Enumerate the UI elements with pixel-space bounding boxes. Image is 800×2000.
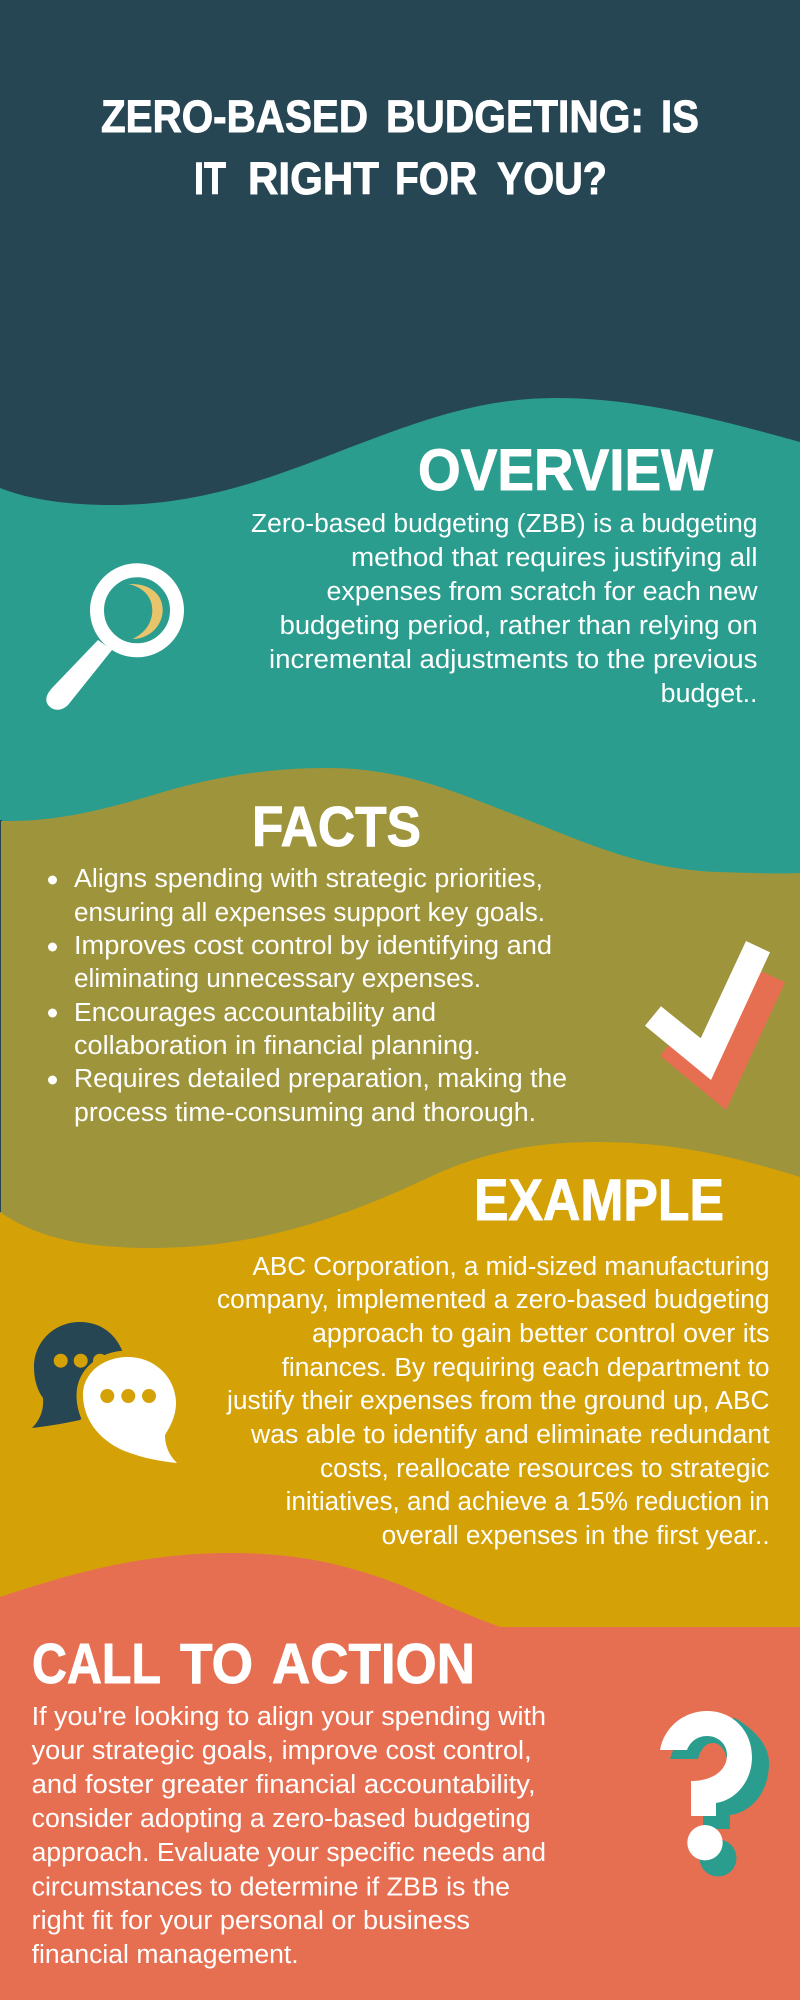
icon: check mark: [645, 941, 785, 1110]
call to action heading: ACTION: [272, 1632, 475, 1696]
call to action text: your strategic goals, improve cost control,: [32, 1737, 532, 1765]
facts bullet list: [48, 865, 567, 1127]
panel: facts: [1, 768, 800, 2000]
facts bullet list: Encourages accountability and: [74, 999, 436, 1027]
example text: costs, reallocate resources to strategic: [320, 1455, 770, 1483]
facts bullet list: collaboration in financial planning.: [74, 1032, 481, 1060]
call to action text: right fit for your personal or business: [32, 1907, 470, 1935]
overview text: expenses from scratch for each new: [326, 578, 758, 606]
facts heading: FACTS: [252, 795, 421, 859]
call to action text: approach. Evaluate your specific needs and: [32, 1839, 546, 1867]
overview text: budget..: [661, 680, 758, 708]
call to action text: If you're looking to align your spending with: [32, 1703, 546, 1731]
call to action wave background: [0, 1553, 800, 2000]
facts bullet list: Requires detailed preparation, making the: [74, 1065, 567, 1093]
example text: justify their expenses from the ground up, ABC: [226, 1387, 770, 1415]
title: [101, 91, 699, 204]
title: IT: [194, 153, 226, 204]
title: ZERO-BASED: [101, 91, 368, 142]
call to action text: and foster greater financial accountability,: [32, 1771, 536, 1799]
example text: initiatives, and achieve a 15% reduction in: [286, 1488, 770, 1516]
icon: magnifying glass: [46, 570, 177, 710]
title: RIGHT: [248, 153, 379, 204]
facts bullet list: process time-consuming and thorough.: [74, 1099, 536, 1127]
example text: company, implemented a zero-based budgeting: [217, 1286, 769, 1314]
example text: finances. By requiring each department to: [282, 1354, 770, 1382]
call to action heading: CALL: [32, 1632, 161, 1696]
example heading: EXAMPLE: [474, 1168, 724, 1233]
title: FOR: [395, 153, 477, 204]
overview text: Zero-based budgeting (ZBB) is a budgeting: [251, 510, 758, 538]
facts wave background: [1, 768, 800, 2000]
call to action heading: [32, 1632, 475, 1696]
example text: [217, 1253, 770, 1550]
overview text: budgeting period, rather than relying on: [280, 612, 758, 640]
panel: example: [0, 1142, 800, 2000]
facts bullet list: Improves cost control by identifying and: [74, 932, 552, 960]
facts bullet list: eliminating unnecessary expenses.: [74, 965, 481, 993]
example text: was able to identify and eliminate redundant: [250, 1421, 770, 1449]
dark speech bubble: [32, 1322, 123, 1428]
example text: approach to gain better control over its: [312, 1320, 770, 1348]
title: IS: [661, 91, 699, 142]
title: BUDGETING:: [386, 91, 644, 142]
example wave background: [0, 1142, 800, 2000]
panel: call to action: [0, 1553, 800, 2000]
overview text: [251, 510, 758, 708]
call to action text: [32, 1703, 546, 1969]
call to action text: consider adopting a zero-based budgeting: [32, 1805, 531, 1833]
facts bullet list: Aligns spending with strategic priorities,: [74, 865, 543, 893]
icon: speech bubbles: [32, 1322, 177, 1463]
icon: question mark: [660, 1711, 769, 1876]
example text: overall expenses in the first year..: [382, 1522, 770, 1550]
left edge strip: [0, 820, 2, 1212]
facts bullet list: ensuring all expenses support key goals.: [74, 899, 545, 927]
title: YOU?: [497, 153, 607, 204]
example text: ABC Corporation, a mid-sized manufacturing: [252, 1253, 770, 1281]
call to action text: circumstances to determine if ZBB is the: [32, 1874, 510, 1902]
overview text: method that requires justifying all: [351, 544, 758, 572]
white speech bubble: [83, 1357, 177, 1463]
overview text: incremental adjustments to the previous: [269, 646, 758, 674]
call to action heading: TO: [180, 1632, 253, 1696]
call to action text: financial management.: [32, 1941, 299, 1969]
overview heading: OVERVIEW: [418, 438, 713, 503]
